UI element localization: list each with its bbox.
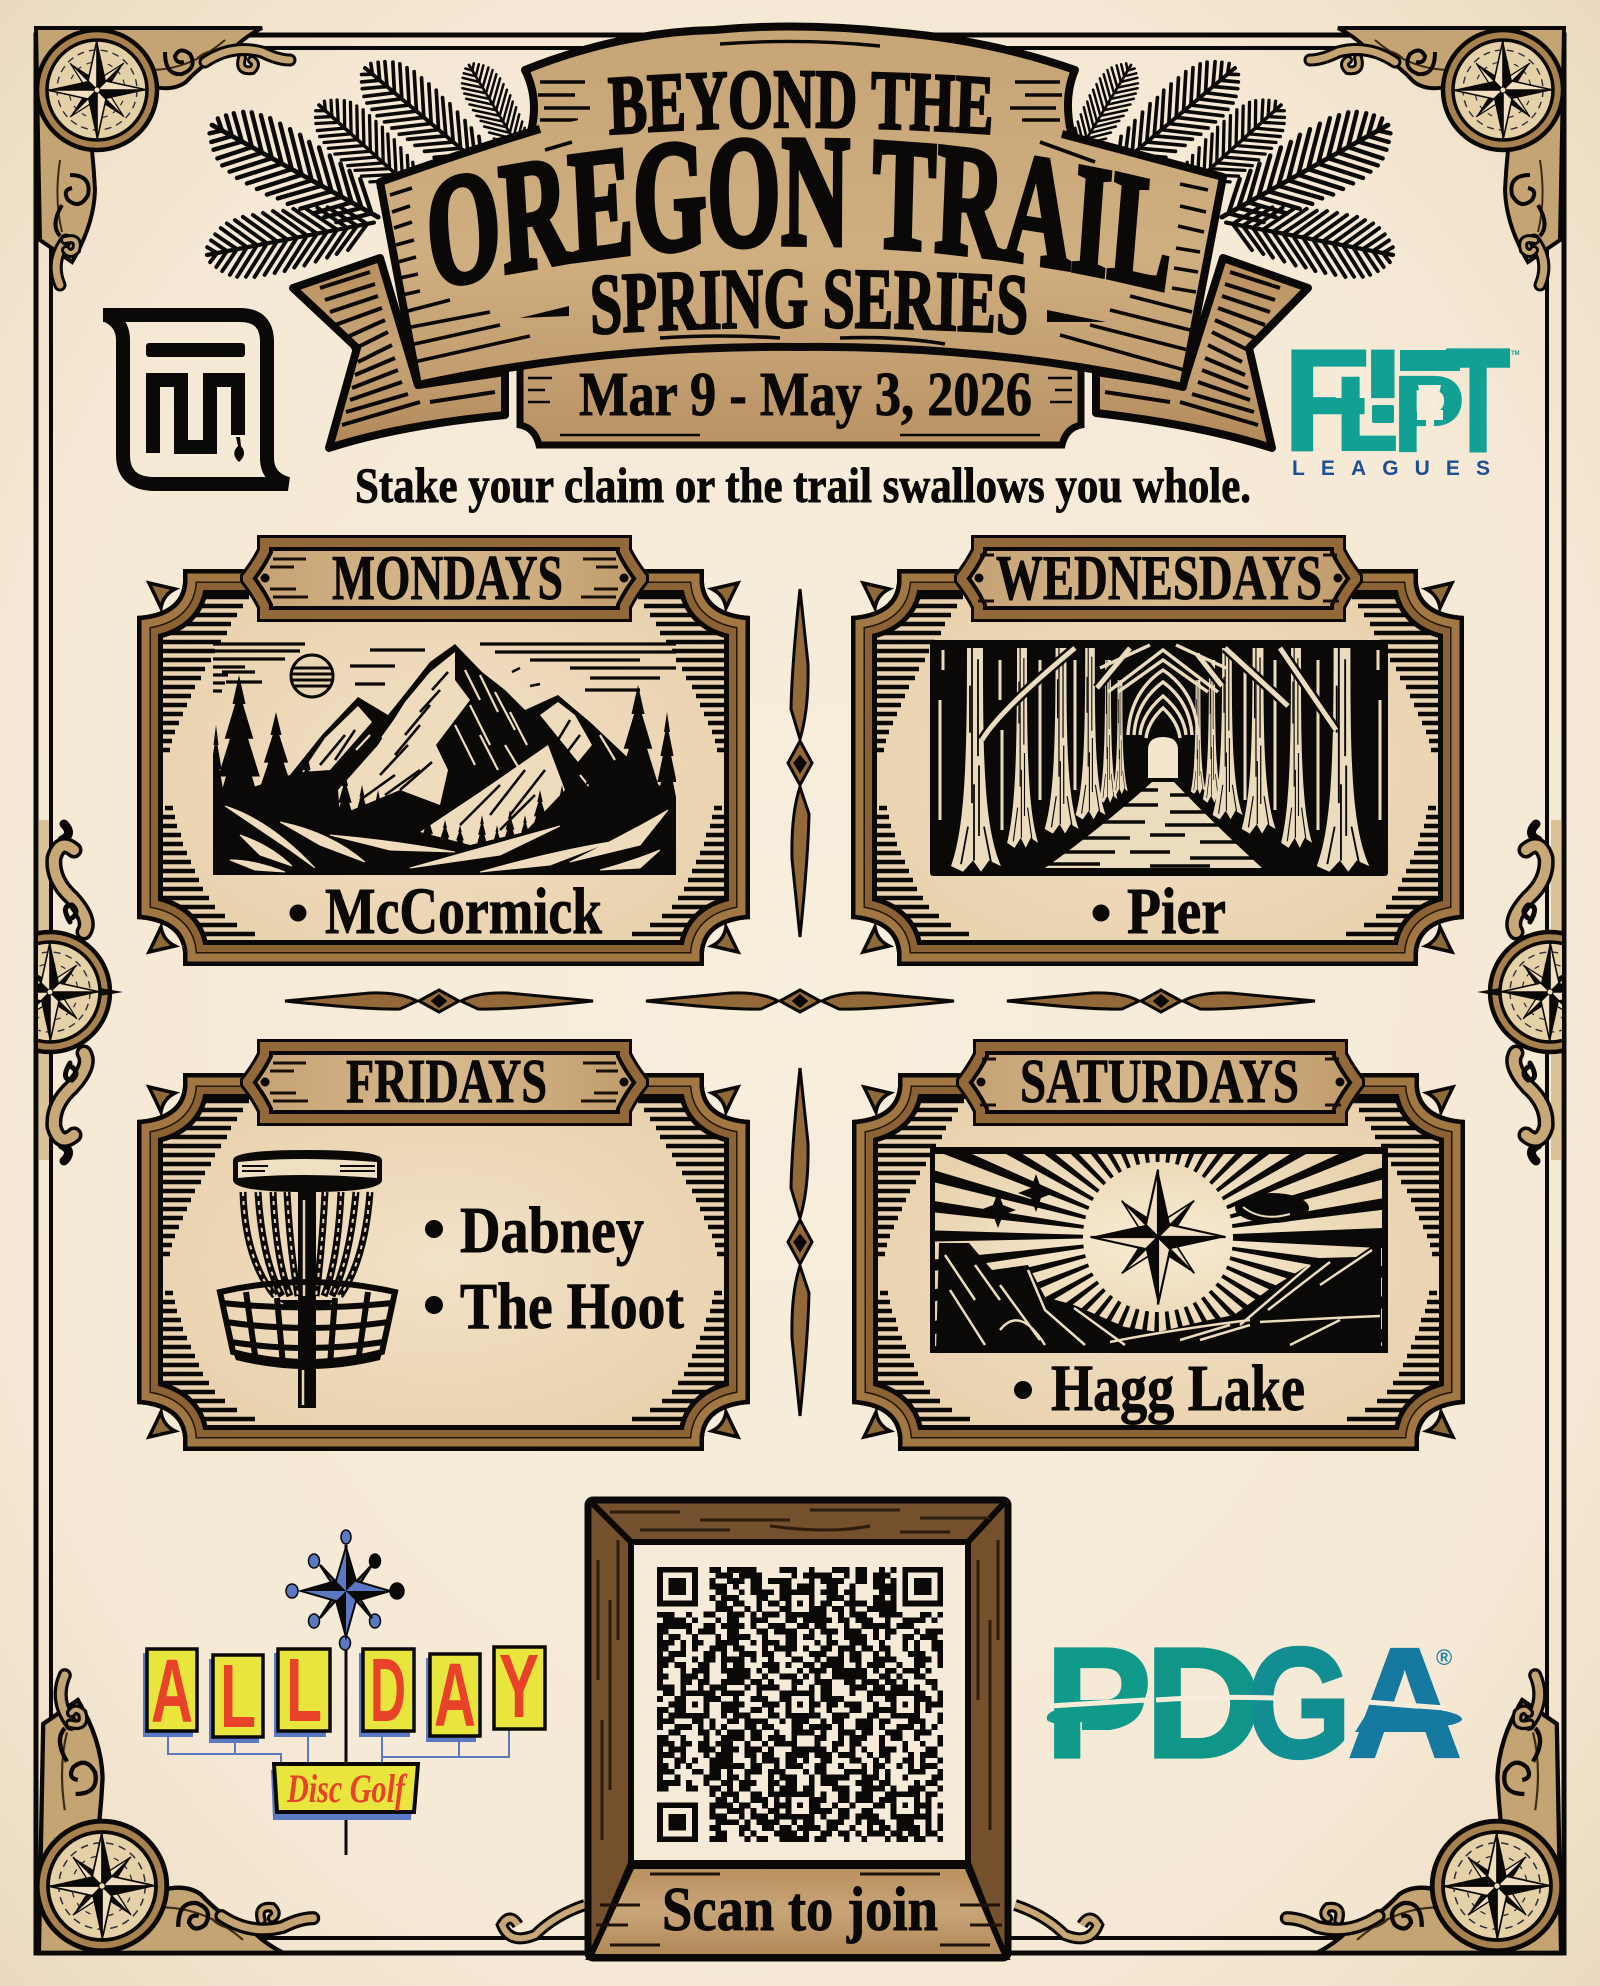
logo: pdga: P (1045, 1615, 1152, 1791)
horizontal ornament right (1007, 990, 1315, 1012)
panel: mondays (137, 535, 750, 966)
logo: all day disc golf (143, 1530, 545, 1855)
banner main band (380, 96, 1223, 387)
venue list: dabney and the hoot: The Hoot (460, 1270, 684, 1343)
vertical ornament upper (788, 589, 812, 937)
panel: saturdays (852, 1037, 1465, 1451)
logo: flipt leagues: TM (1511, 351, 1520, 357)
title: oregon trail: OREGON TRAIL (430, 137, 1170, 293)
logo: flipt leagues: F (1282, 319, 1371, 483)
ribbon tail left (293, 258, 505, 448)
horizontal ornament center (646, 990, 954, 1012)
logo: flipt leagues (1282, 319, 1520, 483)
logo: flipt leagues: LEAGUES (1292, 457, 1490, 480)
logo: flipt leagues: L (1337, 357, 1397, 471)
title: beyond the: BEYOND THE (608, 70, 992, 136)
sign letter boxes: L (286, 1641, 322, 1741)
icon: compass star over mountains (930, 1147, 1388, 1353)
venue list: dabney and the hoot: Dabney (460, 1194, 644, 1267)
logo: flipt leagues: P (1393, 354, 1464, 474)
plaque: fridays (240, 1039, 649, 1126)
icon: compass top left (37, 30, 157, 150)
tagline: Stake your claim or the trail swallows you whole. (355, 457, 1251, 513)
vertical ornament lower (788, 1068, 812, 1416)
plaque: wednesdays (954, 535, 1363, 622)
sign letter boxes: D (370, 1641, 406, 1741)
venue list: dabney and the hoot (425, 1194, 684, 1343)
plaque: mondays (240, 535, 649, 622)
logo: flipt leagues: I (1361, 335, 1405, 413)
icon: compass top right (1443, 30, 1563, 150)
venue: pier (1092, 875, 1226, 948)
date plaque (520, 340, 1081, 445)
banner top sign (525, 26, 1075, 200)
plaque: saturdays: SATURDAYS (1020, 1048, 1299, 1116)
pine branches left (195, 46, 543, 285)
scan to join plaque (590, 1866, 1006, 1957)
plaque: mondays: MONDAYS (332, 542, 563, 613)
logo: pdga: ® (1436, 1645, 1452, 1670)
icon: mountain scene (206, 644, 679, 875)
logo: maze mark (103, 315, 288, 484)
title: oregon trail (430, 137, 1170, 293)
sign letter boxes: A (434, 1646, 476, 1746)
sign letter boxes (143, 1637, 545, 1747)
icon: forest tunnel (930, 640, 1388, 876)
sign letter boxes: Y (499, 1637, 539, 1737)
logo: flipt leagues: T (1446, 319, 1510, 483)
plaque: saturdays (956, 1039, 1365, 1126)
panel: fridays (137, 1039, 750, 1451)
title: beyond the (608, 70, 992, 136)
icon: compass bottom right (1432, 1821, 1562, 1951)
logo: pdga: G (1247, 1615, 1351, 1790)
scan to join plaque: Scan to join (662, 1876, 938, 1944)
title: spring series: SPRING SERIES (592, 268, 1026, 336)
date plaque: Mar 9 - May 3, 2026 (579, 361, 1032, 429)
horizontal ornament left (285, 990, 593, 1012)
icon: compass bottom left (37, 1821, 167, 1951)
side ornament left (38, 820, 123, 1166)
pine branches right (1057, 46, 1405, 285)
side ornament right (1477, 820, 1562, 1166)
logo: pdga: D (1145, 1615, 1262, 1790)
venue: pier: Pier (1127, 875, 1226, 948)
disc golf sign (271, 1764, 418, 1820)
disc golf sign: Disc Golf (286, 1766, 408, 1811)
venue: hagg lake: Hagg Lake (1051, 1352, 1305, 1425)
ribbon tail right (1096, 258, 1308, 448)
title: spring series (520, 268, 1106, 336)
logo: pdga: A (1347, 1615, 1463, 1791)
plaque: fridays: FRIDAYS (346, 1048, 547, 1116)
sign letter boxes: L (220, 1647, 256, 1747)
icon: disc golf basket (220, 1150, 395, 1408)
panel: wednesdays (851, 535, 1464, 966)
plaque: wednesdays: WEDNESDAYS (996, 542, 1322, 613)
logo: pdga (1045, 1615, 1463, 1791)
sign letter boxes: A (151, 1642, 193, 1742)
qr code (657, 1567, 943, 1842)
venue: mccormick: McCormick (325, 875, 602, 948)
qr code wooden frame (502, 1500, 1098, 1958)
